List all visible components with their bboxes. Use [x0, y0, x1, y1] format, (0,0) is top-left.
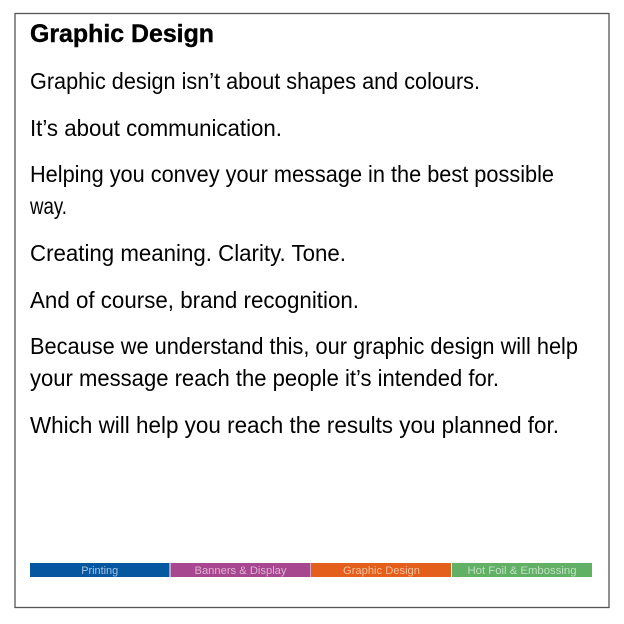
body text	[29, 68, 578, 438]
body text: Helping you convey your message in the best possible	[30, 161, 554, 187]
nav: Banners & Display: Banners & Display	[194, 565, 287, 577]
body text: Because we understand this, our graphic design will help	[30, 333, 578, 359]
body text: your message reach the people it’s intended for.	[30, 365, 499, 391]
body text: way.	[29, 193, 67, 219]
nav: Graphic Design: Graphic Design	[343, 565, 420, 577]
nav: Banners & Display	[170, 563, 310, 577]
title: Graphic Design	[30, 20, 214, 48]
body text: And of course, brand recognition.	[30, 287, 359, 313]
body text: Graphic design isn’t about shapes and colours.	[30, 68, 480, 94]
nav: Hot Foil & Embossing: Hot Foil & Embossing	[468, 565, 576, 577]
body text: It’s about communication.	[30, 115, 282, 141]
navigation bar	[30, 563, 592, 577]
nav: Graphic Design	[311, 563, 451, 577]
nav: Hot Foil & Embossing	[452, 563, 592, 577]
nav: Printing: Printing	[81, 565, 118, 577]
nav: Printing	[30, 563, 170, 577]
body text: Creating meaning. Clarity. Tone.	[30, 240, 346, 266]
body text: Which will help you reach the results you planned for.	[30, 412, 559, 438]
